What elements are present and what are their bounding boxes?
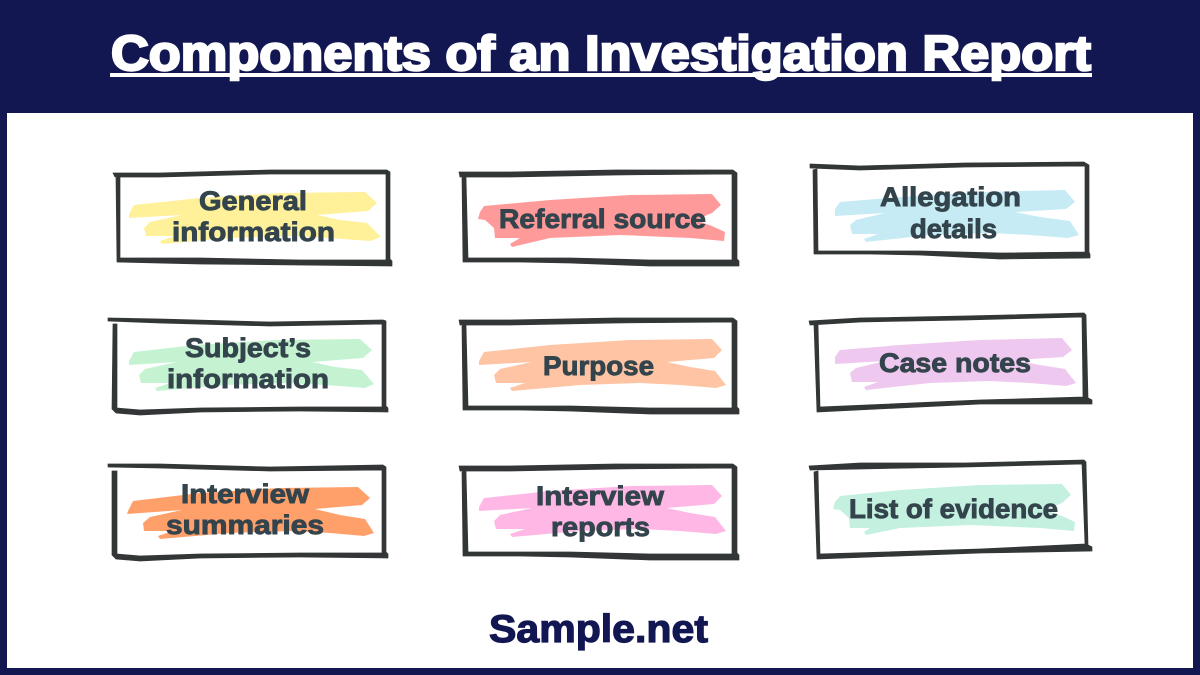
frame [459,318,739,414]
brush: red [478,194,725,247]
label [880,182,1021,244]
brush: lilac [835,338,1076,390]
label: information [172,217,335,247]
label: Subject’s [185,333,311,363]
brush: mint [833,484,1075,535]
card: Referral source [459,170,739,266]
brush: orange [127,487,374,539]
title: Components of an Investigation Report [111,27,1091,81]
brush: blue [835,190,1079,242]
label: Interview [536,481,665,511]
card: List of evidence [809,460,1092,559]
card: Case notes [809,313,1092,412]
frame [108,318,388,415]
brush: yellow [129,192,381,244]
brush: peach [479,339,726,391]
card: Interview reports [459,464,739,560]
frame [809,460,1092,559]
label: information [167,364,329,394]
label: Allegation [880,182,1021,212]
label [536,481,665,542]
frame [809,313,1092,412]
frame [113,170,392,266]
frame [459,464,739,560]
frame [459,170,739,266]
label: reports [551,512,650,542]
brush: green [129,339,374,391]
label [166,479,324,540]
card: Interview summaries [108,464,388,561]
label [167,333,329,394]
card: Allegation details [810,162,1090,259]
label: summaries [166,510,324,540]
frame [810,162,1090,259]
label: List of evidence [849,494,1058,524]
label: Referral source [499,204,706,234]
label: details [910,214,997,244]
label: Case notes [879,348,1031,378]
card: Purpose [459,318,739,414]
card: General information [113,170,392,266]
brush: pink [479,485,726,537]
label: General [199,186,307,216]
label: Interview [181,479,310,509]
footer brand: Sample.net [489,608,708,651]
frame [108,464,388,561]
label: Purpose [543,351,654,381]
card: Subject's information [108,318,388,415]
label [172,186,335,247]
